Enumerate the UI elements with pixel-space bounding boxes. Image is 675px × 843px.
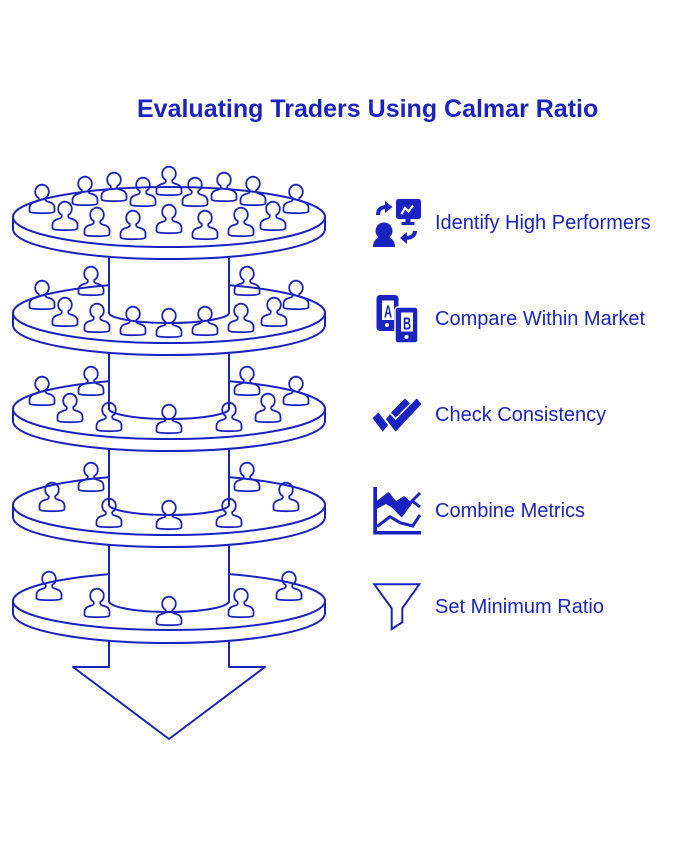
disc 1 bbox=[13, 187, 325, 259]
icon: funnel bbox=[374, 584, 419, 629]
people on disc 1 bbox=[30, 167, 308, 239]
people on disc 2 bbox=[30, 267, 308, 337]
label: compare within market: Compare Within Market bbox=[435, 308, 646, 330]
cylinder 1 to 2 bbox=[109, 247, 229, 323]
icon: A/B phones: A bbox=[384, 303, 392, 322]
stacked funnel diagram bbox=[13, 167, 325, 739]
people on disc 4 bbox=[40, 463, 298, 529]
cylinder 4 to 5 bbox=[109, 535, 229, 612]
cylinder 3 to 4 bbox=[109, 439, 229, 515]
people on disc 5 bbox=[36, 572, 302, 625]
icon: A/B phones: B bbox=[403, 315, 411, 334]
title: Evaluating Traders Using Calmar Ratio bbox=[137, 95, 598, 123]
icon: performers monitor and person bbox=[373, 199, 421, 247]
disc 3 bbox=[13, 379, 325, 451]
disc 5 bbox=[13, 572, 325, 643]
disc 2 bbox=[13, 283, 325, 355]
people on disc 3 bbox=[30, 367, 308, 433]
icon: A/B phones bbox=[376, 295, 418, 343]
label: set minimum ratio: Set Minimum Ratio bbox=[435, 596, 604, 618]
label: combine metrics: Combine Metrics bbox=[435, 500, 585, 522]
icon: double check bbox=[373, 399, 421, 431]
cylinder 2 to 3 bbox=[109, 343, 229, 419]
label: identify high performers: Identify High Performers bbox=[435, 212, 651, 234]
icon: combined chart bbox=[373, 487, 421, 534]
label: check consistency: Check Consistency bbox=[435, 404, 606, 426]
arrow bbox=[73, 630, 265, 739]
disc 4 bbox=[13, 475, 325, 547]
